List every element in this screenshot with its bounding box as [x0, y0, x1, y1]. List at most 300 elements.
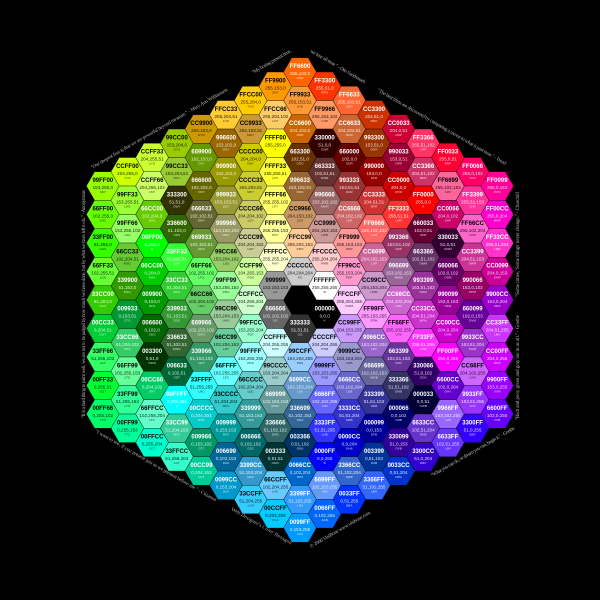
hex 9900CC [481, 286, 514, 314]
hex 0099CC [210, 471, 242, 500]
hex 660066: ODM [444, 276, 452, 280]
hex CC3300 [358, 101, 390, 129]
hex 663366: 102,51,102 [412, 256, 435, 261]
hex 330033: 51,0,51 [440, 242, 456, 247]
hex 66FF00: 102,255,0 [93, 214, 113, 218]
hex CCFF99: CCFF99 [239, 264, 263, 270]
hex 00FF99 [111, 414, 144, 443]
hex 333300: 51,51,0 [169, 199, 185, 204]
perimeter quotes and title [82, 49, 521, 550]
hex 3333CC: 51,51,204 [339, 413, 360, 418]
hex 999999: LG [273, 290, 278, 294]
hex 0000FF [308, 443, 341, 471]
hex CC66CC: CC66CC [387, 292, 411, 298]
hex CC00FF [481, 343, 514, 371]
hex FF6666: LFR [371, 233, 378, 237]
hex CC66CC: 204,102,204 [386, 299, 412, 304]
hex 336699 [284, 400, 316, 428]
hex FF3366: 255,51,102 [412, 142, 435, 147]
hex 993300: DOR [371, 147, 378, 151]
hex CC66FF: 204,102,255 [460, 370, 486, 375]
hex 0033CC: 0,51,204 [390, 470, 408, 475]
hex 000033 [407, 386, 440, 414]
hex 99CCCC: 99CCCC [263, 363, 288, 369]
hex 9933CC: 9933CC [462, 335, 484, 341]
hex 666633: 102,102,51 [190, 214, 213, 218]
hex CC9999 [308, 215, 341, 243]
hex CC0066: DHP [445, 218, 451, 222]
hex 3333FF: 3333FF [314, 420, 335, 426]
hex 00FF66 [86, 400, 119, 428]
hex CC0066: CC0066 [437, 206, 460, 212]
hex 339999: 51,153,153 [239, 413, 263, 418]
hex 33FFFF [185, 371, 218, 400]
hex CCCC99: LWY [247, 247, 254, 251]
hex 0033CC [382, 457, 415, 485]
hex 00CC00 [136, 257, 168, 286]
hex 006699: 0,102,153 [216, 456, 237, 461]
hex CC66CC [382, 286, 415, 314]
hex FF6633: LRO [346, 104, 353, 108]
hex FF6600: 255,102,0 [290, 71, 311, 76]
hex CC99CC: CC99CC [362, 278, 387, 284]
hex CCFFFF [259, 329, 292, 357]
hex 00FFCC: CCT [149, 446, 155, 450]
hex 990066: 153,0,102 [462, 285, 483, 290]
hex CC9933: MOY [247, 133, 254, 137]
hex 00FFFF [160, 386, 193, 414]
quote: right lower: "Rich and poor, green and gray are in us all." - Goethe [516, 314, 521, 420]
hex 000033: 000033 [413, 392, 434, 398]
hex 00CCCC [185, 400, 218, 428]
hex FF6600: FF6600 [290, 64, 311, 70]
hex FFCCFF [333, 286, 366, 314]
hex 999900 [210, 158, 242, 186]
hex 990099 [432, 286, 464, 314]
hex 996633 [284, 172, 316, 200]
hex CCFFCC: PWG [247, 304, 255, 308]
hex 666699: 666699 [364, 363, 385, 369]
hex 999933: DDY [223, 204, 229, 208]
hex CCCC00 [234, 143, 267, 172]
hex FFFF66: LFY [273, 204, 278, 208]
hex 996666: 996666 [315, 192, 335, 198]
hex 66FFFF: LFC [223, 375, 230, 379]
hex 9933FF: 9933FF [462, 392, 483, 398]
hex 996666: 153,102,102 [312, 199, 338, 204]
hex FFCC00: 255,204,0 [240, 100, 261, 104]
hex 33FF99: 51,255,153 [116, 399, 139, 404]
hex 330000: OWR [321, 147, 329, 151]
hex 333300 [160, 186, 193, 215]
hex 6600CC [432, 371, 464, 400]
hex 00CCCC: 0,204,204 [191, 413, 212, 418]
hex 33CCFF [234, 485, 267, 514]
hex 66CC66: 102,204,102 [189, 299, 215, 304]
hex FF6666: FF6666 [364, 221, 385, 227]
hex 00FFFF: 00FFFF [166, 392, 188, 398]
hex FF00CC: MMP [494, 218, 501, 222]
hex 336633: DWG [173, 347, 181, 351]
hex CC99FF: CC99FF [338, 320, 361, 326]
hex FF66FF [382, 314, 415, 343]
hex 3300CC [407, 443, 440, 471]
hex CC3333: 204,51,51 [364, 199, 385, 204]
hex FF0066: PPR [469, 176, 477, 180]
hex 3300FF: BBV [469, 432, 477, 436]
copyright: © 2000 VisiBone www.visibone.com [309, 510, 372, 550]
hex 330033: OWM [444, 247, 452, 251]
hex CC9933 [234, 115, 267, 143]
hex 993399: 153,51,153 [412, 285, 435, 290]
hex 6633CC: 102,51,204 [412, 427, 435, 432]
hex 3333CC [333, 400, 366, 428]
hex 669999: 669999 [265, 392, 286, 398]
hex 006666: 0,102,102 [240, 442, 261, 446]
hex 9900FF: 153,0,255 [487, 384, 508, 390]
hex CC00FF: CC00FF [486, 349, 509, 355]
hex FFCC66: 255,204,102 [263, 114, 289, 119]
hex CC99CC: 204,153,204 [361, 285, 387, 290]
hex FF9933: 255,153,51 [288, 100, 312, 104]
hex 669933 [185, 229, 218, 257]
hex 6699FF [308, 471, 341, 500]
hex 9900CC: 153,0,204 [487, 299, 508, 304]
hex 339966 [185, 343, 218, 371]
hex 006633: 006633 [167, 363, 187, 369]
hex 9933FF: LHV [470, 404, 477, 408]
hex CC33FF: LMV [494, 332, 501, 336]
hex 6600FF [481, 400, 514, 428]
hex 66CC00: DHS [149, 218, 155, 222]
hex FFFF66: 255,255,102 [263, 199, 289, 204]
hex 990000: 990000 [364, 164, 385, 170]
hex FF33CC: 255,51,204 [486, 242, 509, 247]
hex FFCC33: 255,204,51 [214, 114, 238, 119]
quote: top: "My boring present time, [252, 49, 293, 76]
hex 66CC33: 102,204,51 [116, 256, 139, 261]
hex FF0000: FF0000 [413, 192, 434, 198]
hex FF0066: 255,0,102 [462, 171, 483, 176]
hex 6666FF: 102,102,255 [312, 399, 338, 404]
hex 999966: 999966 [216, 221, 237, 227]
hex 33CC99: 51,204,153 [165, 427, 189, 432]
hex 66FF33 [86, 257, 119, 286]
hex 330099 [382, 428, 415, 457]
hex 990099: DFM [445, 304, 452, 308]
hex 009966: DTC [198, 446, 205, 450]
hex 996699: 153,102,153 [386, 270, 412, 276]
hex 9966FF: 9966FF [438, 406, 459, 412]
hex 006666 [234, 428, 267, 457]
hex CC9966 [284, 200, 316, 229]
hex 666666: DG [273, 318, 278, 322]
hex 33FF33 [160, 243, 193, 272]
hex 330033 [432, 229, 464, 257]
hex 66FFFF: 102,255,255 [213, 370, 239, 375]
hex CC9966: LDO [297, 218, 304, 222]
hex 66CC99: 102,204,153 [213, 342, 239, 347]
hex 00CCFF: 0,204,255 [265, 513, 286, 518]
hex 33CC66 [111, 329, 144, 357]
hex 3366CC: 3366CC [338, 463, 361, 469]
hex FF0099: 255,0,153 [487, 185, 508, 190]
title: Web Designer's Color Hexagon [230, 507, 293, 546]
hex FF33FF: FF33FF [413, 335, 434, 341]
hex CC6633: 204,102,51 [338, 128, 361, 133]
hex 9966CC [358, 329, 390, 357]
hex 336666: DWC [272, 432, 280, 436]
hex 99CC66: 153,204,102 [213, 256, 239, 261]
hex 3300CC: 3300CC [412, 449, 435, 455]
hex 9900FF: VVM [494, 390, 501, 394]
hex 000000 [308, 300, 341, 329]
hex 000033: 0,0,51 [417, 399, 430, 404]
hex CC3399 [456, 243, 489, 272]
hex CCFF00 [111, 158, 144, 186]
hex 330066: ODV [420, 375, 427, 379]
hex 6600FF: VVB [494, 418, 500, 422]
hex CC33CC: CC33CC [411, 306, 436, 312]
hex 006699 [210, 443, 242, 471]
hex FFCC66 [259, 101, 292, 129]
hex 9966CC: 9966CC [363, 335, 386, 341]
hex 3366CC [333, 457, 366, 485]
hex FF3300: FF3300 [314, 78, 336, 84]
hex CC6600: 204,102,0 [290, 128, 311, 133]
hex FF9966: LOR [322, 119, 329, 123]
hex CC00FF: MMV [494, 361, 502, 365]
hex 000066: 000066 [389, 406, 409, 412]
hex CC3399: MPM [469, 261, 477, 265]
hex FFCC99 [284, 229, 316, 257]
hex 336666 [259, 414, 292, 443]
hex CC0033: CC0033 [388, 121, 410, 127]
hex 996600 [210, 129, 242, 158]
hex 993399 [407, 272, 440, 300]
hex FF3366: LRP [420, 147, 426, 151]
hex 0099FF [284, 514, 316, 542]
hex 9933FF: 153,51,255 [461, 399, 485, 404]
hex CCFFFF: CCFFFF [264, 335, 287, 341]
hex 66CC99 [210, 329, 242, 357]
hex FFFFCC [259, 243, 292, 272]
hex CC9900 [185, 115, 218, 143]
hex 66FFCC: 66FFCC [141, 406, 164, 412]
hex 003399: 0,51,153 [365, 456, 383, 461]
hex 669900: 102,153,0 [191, 156, 212, 162]
quote: bottom left: "I want to see, if you present just as we present before me." - Cézanne [94, 429, 218, 504]
hex 9966CC: LDV [371, 347, 378, 351]
hex CCCCFF [308, 329, 341, 357]
hex FF6600: OOR [296, 76, 304, 80]
hex 666699: MWB [370, 375, 378, 379]
hex FFCC33: FFCC33 [215, 107, 238, 113]
hex CC0000 [382, 172, 415, 200]
hex CCFF33: LYS [149, 162, 155, 166]
hex 66CC66 [185, 286, 218, 314]
hex 66FFCC [136, 400, 168, 428]
hex CC66FF [456, 357, 489, 386]
hex 99FFCC: PDT [248, 332, 254, 336]
hex 999999 [259, 272, 292, 300]
hex 9900CC: DMV [494, 304, 502, 308]
hex 330099: DVB [395, 446, 402, 450]
hex 9900FF [481, 371, 514, 400]
hex 00CC99: 0,204,153 [191, 470, 212, 475]
hex CCFF00: 204,255,0 [117, 171, 138, 176]
hex FFCCCC: 255,204,204 [312, 256, 338, 261]
hex 660000: 102,0,0 [342, 156, 357, 162]
hex 66FF66: 66FF66 [191, 264, 212, 270]
hex CC9999: CC9999 [314, 221, 336, 227]
hex 6633FF: LBV [445, 446, 452, 450]
quote: top right b: "The best films are discovered by comparing a movie to what is past time." - Trend [376, 88, 507, 167]
hex CCFF33 [136, 143, 168, 172]
hex 339900: DSG [124, 290, 131, 294]
hex FF00FF: 255,0,255 [438, 356, 459, 361]
hex 009900 [136, 286, 168, 314]
hex CCFFCC [234, 286, 267, 314]
hex 333333: 333333 [290, 320, 311, 326]
hex 339933: 51,153,51 [167, 313, 187, 318]
hex 9933CC: 153,51,204 [461, 342, 485, 347]
hex 669966: 102,153,102 [189, 328, 215, 332]
hex 990033: 153,0,51 [390, 156, 408, 162]
hex 99CC99: 153,204,153 [213, 313, 239, 318]
hex 663333 [308, 158, 341, 186]
hex FF9900 [259, 72, 292, 101]
hex 333333 [284, 314, 316, 343]
hex FF9999 [333, 229, 366, 257]
hex 669999: MWC [272, 404, 280, 408]
hex 999933 [210, 186, 242, 215]
hex CCFF66: LSY [149, 190, 155, 194]
hex FF6699: FF6699 [438, 178, 459, 184]
hex 00CC99: 00CC99 [190, 463, 213, 469]
hex 996633: 153,102,51 [288, 185, 312, 190]
hex CC3399: 204,51,153 [461, 256, 485, 261]
hex 00CC99: DCT [198, 475, 205, 479]
hex FF99CC: 255,153,204 [337, 270, 363, 276]
hex FF9966: 255,153,102 [312, 114, 338, 119]
hex FF33CC: LMP [494, 247, 500, 251]
hex 33CC00: 33CC00 [92, 292, 114, 298]
hex FFCC33: LYO [223, 119, 230, 123]
hex 00FFCC: 0,255,204 [142, 442, 163, 446]
hex 003333 [259, 443, 292, 471]
quote: top left: "Our deepest fear is that we are powerful beyond measure." - Mary Ann Williamson [90, 88, 229, 171]
hex 000000: 000000 [315, 306, 335, 312]
hex 009933 [111, 300, 144, 329]
hex 3300CC: DBV [420, 461, 427, 465]
hex CCFF00: CCFF00 [116, 164, 139, 170]
hex 99FF66: 153,255,102 [115, 228, 141, 233]
hex 330000 [308, 129, 341, 158]
hex 333333: OG [298, 332, 303, 336]
hex FFFFCC: PWY [272, 261, 279, 265]
hex CC9966: CC9966 [289, 206, 312, 212]
hex 00FF33: 00FF33 [92, 378, 114, 384]
hex 9900CC: 9900CC [486, 292, 509, 298]
hex CCCCFF: CCCCFF [312, 335, 337, 341]
hex FF3300 [308, 72, 341, 101]
hex 006633: 0,102,51 [168, 370, 186, 375]
hex CC00CC [432, 314, 464, 343]
hex 333366: 333366 [389, 378, 409, 384]
hex 99FF00 [86, 172, 119, 200]
hex 993333 [333, 172, 366, 200]
hex FF9999: PDR [346, 247, 353, 251]
hex 6699FF: 6699FF [314, 477, 335, 483]
hex FF9933: LHO [297, 104, 304, 108]
hex 9966CC: 153,102,204 [361, 342, 387, 347]
hex 003333: OWC [272, 461, 280, 465]
hex FF6699: 255,102,153 [435, 185, 461, 190]
hex 0000FF: B [324, 461, 326, 465]
hex 33FF99: LHT [124, 404, 130, 408]
hex 339900: 51,153,0 [118, 285, 137, 290]
hex 660099: DVM [469, 318, 476, 322]
hex FF00FF: M [447, 361, 450, 365]
hex CC9999: LWR [321, 233, 329, 237]
hex 999933: 999933 [216, 192, 237, 198]
hex 660000: 660000 [339, 150, 360, 156]
hex CCCC33: MFY [247, 190, 254, 194]
hex 99FF33: 99FF33 [117, 192, 138, 198]
hex CCFF33: 204,255,51 [141, 156, 164, 162]
hex CC3333: MFR [371, 204, 378, 208]
hex 66FF66 [185, 257, 218, 286]
hex 666600: ODY [198, 190, 205, 194]
hex FF66FF: FF66FF [388, 320, 410, 326]
hex 33CCCC: 33CCCC [214, 392, 239, 398]
hex 009900: 0,153,0 [144, 299, 160, 304]
hex 003366: 003366 [290, 434, 311, 440]
hex 99FF66: LSG [124, 233, 131, 237]
hex 33CCCC [210, 386, 242, 414]
hex 990033: DPR [395, 162, 403, 166]
hex CC6699 [358, 243, 390, 272]
hex 000099 [358, 414, 390, 443]
hex FFFF00: Y [274, 147, 276, 151]
hex 0066CC: 0066CC [289, 463, 312, 469]
hex CC99FF: 204,153,255 [337, 328, 363, 332]
hex FF00CC: 255,0,204 [487, 214, 508, 218]
hex 33CC33 [160, 272, 193, 300]
hex 666666: 102,102,102 [263, 313, 289, 318]
hex 00FF33 [86, 371, 119, 400]
center black hex [284, 286, 316, 314]
hex CCCC66: 204,204,102 [238, 214, 264, 218]
hex 330066: 51,0,102 [414, 370, 433, 375]
hex FF33CC: FF33CC [486, 235, 509, 241]
hex 006633 [160, 357, 193, 386]
hex 663333: 663333 [315, 164, 335, 170]
hex 999966: 153,153,102 [213, 228, 239, 233]
hex FF6633: FF6633 [339, 92, 360, 98]
quote: right upper: "Some times, 'Some things' never change." - Churchill [516, 191, 521, 297]
hex FF66CC: LPM [469, 233, 476, 237]
hex FFCCFF: 255,204,255 [337, 299, 363, 304]
hex 66CC00: 66CC00 [141, 206, 164, 212]
hex FF33FF: 255,51,255 [412, 342, 435, 347]
hex 6633FF: 6633FF [438, 434, 459, 440]
hex 99CC99: LWG [223, 318, 230, 322]
hex CC9933: CC9933 [240, 121, 262, 127]
hex 9999CC: 9999CC [338, 349, 361, 355]
hex 006600: ODG [149, 332, 156, 336]
